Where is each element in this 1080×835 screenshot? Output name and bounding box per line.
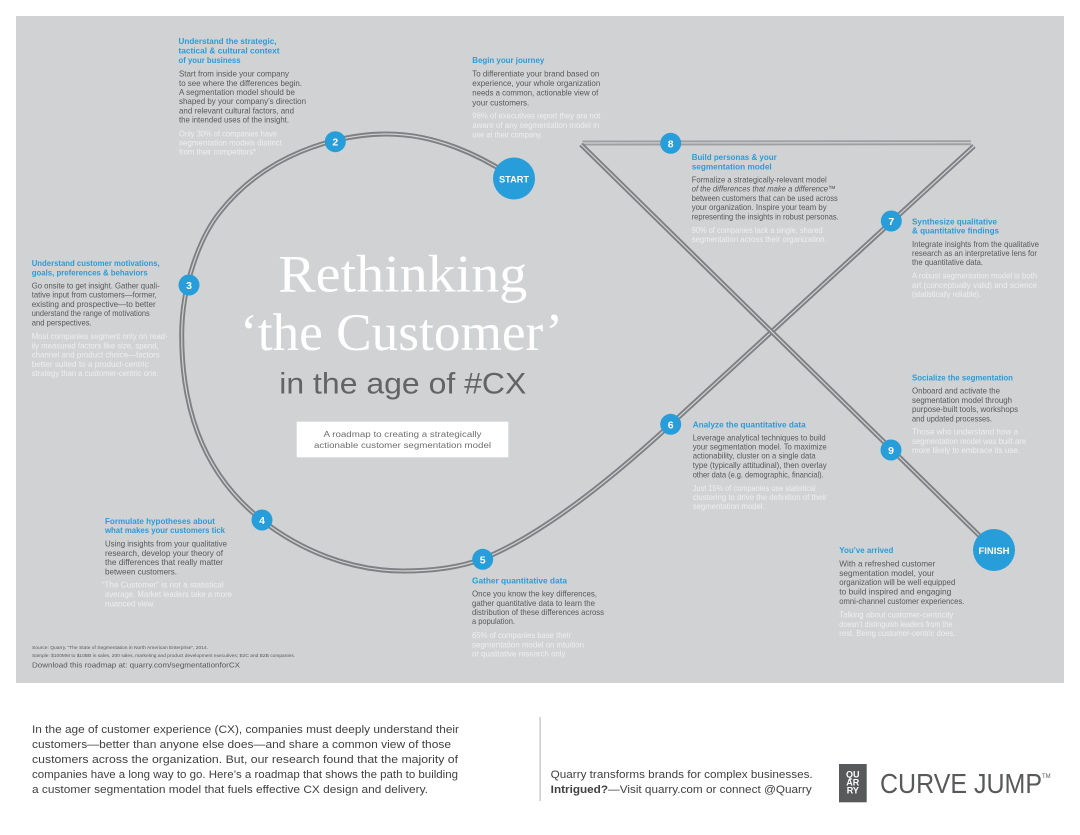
start marker (493, 158, 535, 200)
subtitle box (297, 422, 508, 457)
intro paragraph: customers across the organization. But, our research found that the majority of (32, 754, 459, 766)
heading: what makes your customers tick (104, 525, 225, 535)
body: type (typically attitudinal), then overlay (693, 461, 828, 470)
statistic (32, 332, 168, 378)
statistic (839, 610, 955, 638)
heading: Socialize the segmentation (912, 372, 1013, 382)
statistic: 65% of companies base their (472, 631, 571, 640)
statistic (693, 484, 827, 511)
body: of the differences that make a difference™ (692, 184, 836, 194)
body: A segmentation model should be (179, 88, 295, 97)
heading: Begin your journey (472, 55, 545, 65)
body (472, 590, 604, 626)
background panel (16, 16, 1064, 683)
body: to build inspired and engaging (839, 588, 952, 596)
body: Once you know the key differences, (472, 590, 597, 598)
intro paragraph: In the age of customer experience (CX), companies must deeply understand their (32, 724, 459, 736)
body: omni-channel customer experiences. (839, 597, 964, 606)
statistic (102, 580, 232, 608)
heading: Understand the strategic, (178, 36, 276, 46)
text block: step 5 (472, 576, 604, 658)
logo: Quarry: RY (847, 786, 859, 796)
journey track (182, 134, 994, 571)
body: research, develop your theory of (105, 549, 224, 558)
heading (178, 36, 280, 65)
statistic: segmentation model on intuition (472, 640, 584, 650)
statistic: “The Customer” is not a statistical (102, 580, 224, 590)
statistic: Most companies segment only on read- (32, 332, 168, 341)
heading: Synthesize qualitative (912, 216, 997, 226)
statistic: better suited to a product-centric (32, 360, 149, 369)
title: Rethinking (278, 246, 527, 304)
step marker 8 (660, 133, 681, 154)
body: your customers. (472, 98, 529, 108)
body: purpose-built tools, workshops (912, 405, 1018, 414)
text block: begin your journey (472, 55, 601, 140)
body: tative input from customers—former, (32, 290, 157, 300)
heading: segmentation model (692, 162, 772, 172)
body: Go onsite to get insight. Gather quali- (32, 282, 160, 290)
title (240, 246, 563, 400)
text block: step 8 (692, 152, 839, 244)
source note (32, 645, 295, 670)
source note: Source: Quarry, “The State of Segmentation in North American Enterprise”, 2014. (32, 645, 208, 650)
statistic: ily measured factors like size, spend, (32, 342, 159, 350)
statistic: doesn’t distinguish leaders from the (839, 620, 953, 629)
step marker 4 (252, 510, 272, 530)
statistic: segmentation model was built are (912, 437, 1026, 446)
heading: & quantitative findings (912, 226, 999, 236)
statistic: Talking about customer-centricity (839, 610, 954, 620)
step marker 3: 3 (186, 280, 192, 292)
body: shaped by your company’s direction (179, 97, 306, 106)
body: other data (e.g. demographic, financial). (693, 470, 824, 480)
intro paragraph (32, 724, 459, 796)
body: Formalize a strategically-relevant model (692, 176, 827, 184)
heading: Gather quantitative data (472, 576, 567, 586)
statistic: art (conceptually valid) and science (912, 281, 1037, 290)
step marker 6 (660, 414, 681, 435)
statistic: segmentation across their organization. (692, 235, 827, 244)
statistic: more likely to embrace its use. (912, 446, 1020, 455)
statistic (472, 112, 601, 140)
statistic: 98% of executives report they are not (472, 112, 601, 120)
statistic (472, 631, 584, 658)
body: needs a common, actionable view of (472, 88, 599, 98)
body: segmentation model through (912, 396, 1012, 405)
body: Integrate insights from the qualitative (912, 240, 1039, 249)
body: your organization. Inspire your team by (692, 203, 828, 212)
body (472, 70, 601, 108)
heading (692, 152, 777, 172)
company statement: Quarry transforms brands for complex businesses. (551, 769, 813, 781)
logo: Quarry: QU (846, 770, 860, 780)
logo: Curve Jump: TM (1042, 774, 1051, 780)
body: segmentation model, your (839, 569, 935, 578)
body: existing and prospective—to better (32, 300, 156, 309)
body: between customers. (105, 568, 177, 576)
logo: Quarry (839, 764, 867, 802)
step marker 5: 5 (480, 554, 486, 566)
body: Start from inside your company (179, 70, 290, 78)
heading: goals, preferences & behaviors (32, 268, 148, 278)
finish marker: FINISH (978, 546, 1010, 557)
body: your segmentation model. To maximize (693, 442, 827, 452)
body: Onboard and activate the (912, 386, 1000, 396)
title: ‘the Customer’ (240, 304, 563, 362)
start marker: START (499, 174, 529, 186)
body (912, 386, 1018, 424)
statistic (912, 272, 1037, 299)
heading: You’ve arrived (839, 545, 893, 555)
step marker 9: 9 (888, 445, 894, 457)
statistic (179, 130, 283, 156)
source note: Download this roadmap at: quarry.com/segmentationforCX (32, 660, 240, 670)
body (179, 70, 306, 124)
body: representing the insights in robust personas. (692, 212, 839, 222)
step marker 6: 6 (668, 419, 674, 431)
body: and relevant cultural factors, and (179, 106, 294, 116)
statistic: or qualitative research only. (472, 650, 567, 658)
body: understand the range of motivations (32, 309, 150, 318)
intro paragraph: a customer segmentation model that fuels effective CX design and delivery. (32, 784, 428, 796)
heading: tactical & cultural context (178, 46, 280, 56)
body (105, 540, 227, 576)
statistic: 90% of companies lack a single, shared (692, 226, 823, 235)
text block: step 6 (693, 420, 828, 511)
step marker 8: 8 (668, 138, 674, 150)
heading: Build personas & your (692, 152, 777, 162)
body: distribution of these differences across (472, 608, 604, 617)
statistic: Just 15% of companies use statistical (693, 484, 816, 493)
company statement (551, 769, 813, 796)
heading (912, 216, 999, 236)
statistic: rest. Being customer-centric does. (839, 629, 955, 638)
heading: Understand customer motivations, (32, 258, 160, 268)
intro paragraph: customers—better than anyone else does—and share a common view of those (32, 739, 451, 751)
body: and perspectives. (32, 318, 92, 328)
body (692, 176, 839, 222)
body (32, 282, 160, 328)
statistic: (statistically reliable). (912, 290, 981, 299)
heading (32, 258, 160, 278)
body (839, 560, 964, 606)
heading (104, 516, 225, 535)
text block: step 9 (912, 372, 1026, 455)
body: the quantitative data. (912, 258, 983, 267)
statistic (692, 226, 827, 244)
source note: Sample: $100MM to $10BB in sales, 200 sales, marketing and product development executives; B2C and B2B companies. (32, 653, 295, 658)
step marker 3 (178, 274, 200, 296)
statistic: strategy than a customer-centric one. (32, 369, 159, 378)
body: gather quantitative data to learn the (472, 599, 595, 608)
text block: you've arrived (839, 545, 964, 638)
body: between customers that can be used across (692, 194, 838, 203)
step marker 4: 4 (259, 515, 265, 527)
body: organization will be well equipped (839, 578, 956, 587)
body: and updated processes. (912, 414, 992, 424)
step marker 7 (881, 210, 902, 232)
text block: step 7 (912, 216, 1039, 299)
step marker 5 (472, 549, 493, 570)
company statement: Intrigued? —Visit quarry.com or connect @Quarry (551, 784, 812, 796)
statistic: channel and product choice—factors (32, 350, 160, 360)
body: Leverage analytical techniques to build (693, 434, 826, 442)
intro paragraph: companies have a long way to go. Here’s a roadmap that shows the path to building (32, 769, 458, 781)
body: the intended uses of the insight. (179, 116, 289, 124)
statistic: segmentation model. (693, 502, 765, 511)
statistic: nuanced view. (105, 600, 155, 608)
statistic: clustering to drive the definition of their (693, 493, 827, 502)
subtitle box: actionable customer segmentation model (314, 440, 491, 450)
statistic (912, 428, 1026, 455)
body: actionability, cluster on a single data (693, 452, 816, 460)
subtitle box: A roadmap to creating a strategically (324, 429, 482, 439)
statistic: use at their company. (472, 130, 542, 140)
logo: Quarry: AR (846, 778, 860, 788)
step marker 9 (880, 440, 902, 460)
statistic: average. Market leaders take a more (105, 590, 232, 599)
step marker 2 (325, 131, 346, 152)
statistic: aware of any segmentation model in (472, 121, 600, 130)
heading: of your business (178, 55, 241, 65)
title: in the age of #CX (279, 367, 526, 400)
body (912, 240, 1039, 267)
body: research as an interpretative lens for (912, 249, 1037, 258)
body: experience, your whole organization (472, 79, 601, 88)
body: the differences that really matter (105, 558, 223, 567)
body: To differentiate your brand based on (472, 70, 600, 78)
statistic: segmentation models distinct (179, 138, 283, 148)
body: With a refreshed customer (839, 560, 936, 568)
statistic: A robust segmentation model is both (912, 272, 1037, 280)
logo: Curve Jump: CURVE JUMP (880, 768, 1042, 799)
text block: step 3 (32, 258, 168, 378)
heading: Analyze the quantitative data (693, 420, 806, 430)
text block: step 4 (102, 516, 232, 608)
body: to see where the differences begin. (179, 79, 302, 88)
statistic: Only 30% of companies have (179, 130, 277, 138)
body (693, 434, 828, 480)
step marker 2: 2 (332, 136, 338, 148)
statistic: Those who understand how a (912, 428, 1018, 436)
text block: step 2 (178, 36, 306, 156)
heading: Formulate hypotheses about (105, 516, 215, 526)
body: a population. (472, 617, 515, 626)
step marker 7: 7 (888, 216, 894, 228)
statistic: from their competitors* (179, 148, 257, 156)
finish marker (973, 529, 1015, 571)
body: Using insights from your qualitative (105, 540, 227, 548)
